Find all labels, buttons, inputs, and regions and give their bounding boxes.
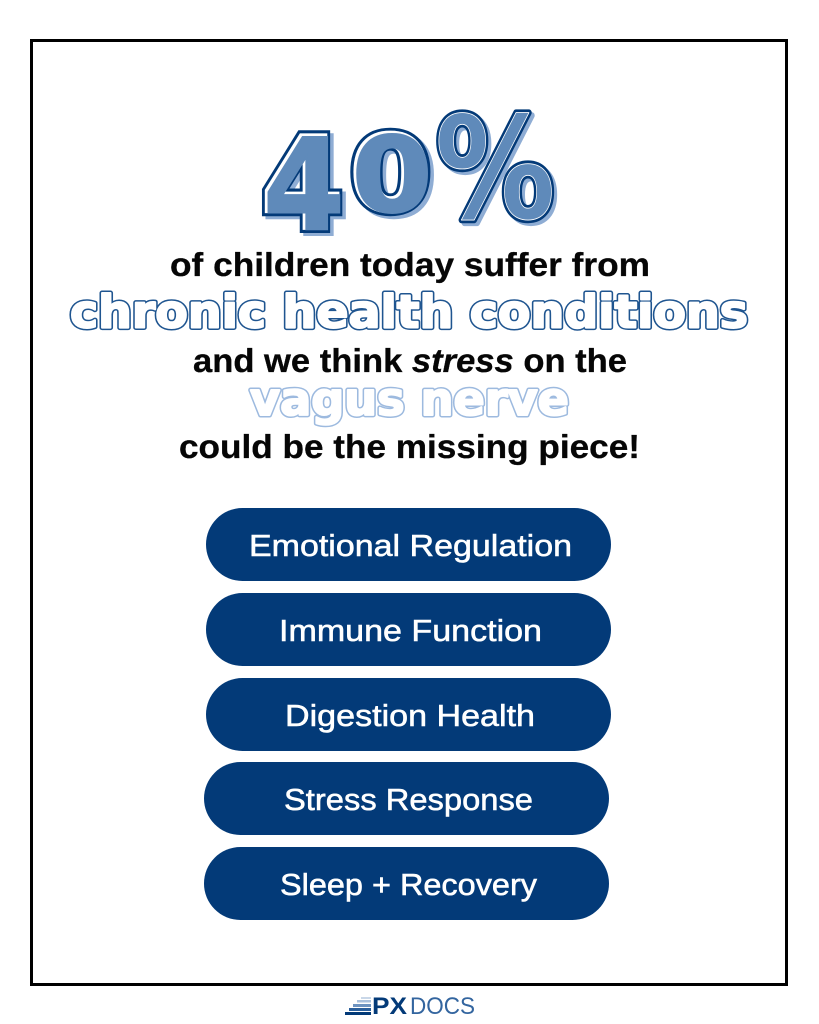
closing line: could be the missing piece! (179, 428, 640, 465)
intro line: of children today suffer from (170, 246, 650, 283)
pill: Stress Response (204, 762, 609, 835)
icon: stairs (345, 997, 371, 1015)
pill: Digestion Health: Digestion Health (285, 698, 535, 733)
percent sign: % (435, 87, 555, 253)
outlined heading: vagus nerve: vagus nerve (250, 373, 569, 426)
digit 0: 0 (352, 115, 432, 236)
wordmark: PX (372, 993, 407, 1020)
pill: Emotional Regulation: Emotional Regulation (249, 528, 572, 563)
outlined heading: chronic health conditions: chronic health conditions (70, 286, 748, 338)
pill: Digestion Health (206, 678, 611, 751)
pill: Stress Response: Stress Response (284, 782, 533, 817)
pill: Sleep + Recovery: Sleep + Recovery (280, 867, 538, 902)
logo: PX DOCS (345, 993, 475, 1020)
pill: Immune Function: Immune Function (279, 613, 542, 648)
logo: PX DOCS: DOCS (410, 993, 475, 1020)
digit 4: 4 (263, 112, 345, 260)
digit 4: 4 (262, 110, 343, 258)
outlined heading: vagus nerve: vagus nerve (250, 373, 569, 426)
headline statistic: 40% (262, 87, 558, 261)
pill: Sleep + Recovery (204, 847, 609, 920)
digit 0: 0 (353, 117, 434, 238)
pill: Emotional Regulation (206, 508, 611, 581)
digit 4: 4 (265, 114, 346, 261)
outlined heading: chronic health conditions: chronic health conditions (70, 286, 748, 338)
percent sign: % (438, 90, 558, 255)
digit 0: 0 (350, 114, 431, 235)
digit 4: 4 (262, 110, 343, 258)
pill: Immune Function (206, 593, 611, 666)
middle line: and we think stress on the (193, 342, 627, 379)
percent sign: % (435, 87, 555, 253)
digit 0: 0 (350, 114, 431, 235)
